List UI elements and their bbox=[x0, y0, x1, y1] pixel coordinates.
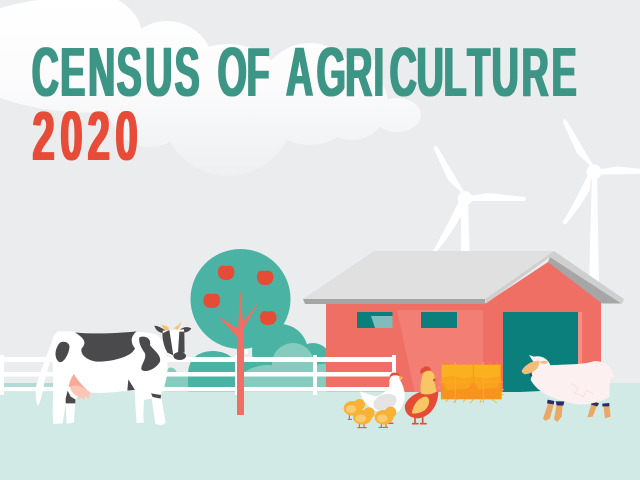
title bbox=[32, 33, 577, 176]
cloud bbox=[0, 0, 421, 176]
bushes bbox=[0, 324, 364, 392]
cow bbox=[36, 322, 191, 425]
apples bbox=[203, 266, 276, 325]
sheep body bbox=[531, 361, 615, 405]
hay bale bbox=[438, 361, 504, 403]
apple tree bbox=[190, 249, 290, 415]
chick one bbox=[344, 399, 365, 419]
door frame highlight bbox=[578, 312, 582, 366]
wind turbine: right bbox=[563, 119, 640, 285]
chick two bbox=[353, 407, 375, 428]
cow tail bbox=[36, 342, 52, 406]
barn bbox=[303, 251, 624, 394]
rooster bbox=[405, 366, 438, 424]
title line two: 2020 bbox=[32, 99, 138, 176]
sheep head bbox=[522, 355, 551, 375]
cow head bbox=[154, 322, 191, 360]
ground bbox=[0, 383, 640, 480]
wind turbine: left bbox=[433, 146, 526, 251]
white hen bbox=[360, 373, 405, 424]
light bushes bbox=[0, 343, 364, 392]
roof bbox=[303, 251, 624, 304]
hay shading patches bbox=[441, 376, 501, 390]
hay binding and loose straw bbox=[438, 362, 504, 403]
hay straw lines bbox=[441, 361, 501, 399]
chicks bbox=[344, 399, 396, 428]
cow udder bbox=[69, 374, 91, 400]
window right bbox=[421, 312, 457, 328]
sheep wool folds bbox=[572, 383, 593, 397]
chick three bbox=[375, 407, 396, 427]
tree crown bbox=[190, 249, 290, 349]
cow spots bbox=[56, 331, 161, 403]
lighter wall panel bbox=[397, 310, 483, 394]
cow body bbox=[52, 331, 168, 425]
window left bbox=[357, 312, 392, 328]
door bbox=[503, 312, 578, 394]
sheep legs bbox=[543, 403, 611, 422]
barn wall bbox=[326, 262, 601, 394]
tree trunk bbox=[218, 289, 260, 415]
sheep socks bbox=[530, 373, 609, 406]
title line one: CENSUS OF AGRICULTURE bbox=[32, 33, 577, 111]
sheep bbox=[522, 355, 615, 422]
fence bbox=[0, 349, 396, 395]
farm animals bbox=[344, 355, 615, 428]
dark bushes bbox=[188, 324, 331, 392]
